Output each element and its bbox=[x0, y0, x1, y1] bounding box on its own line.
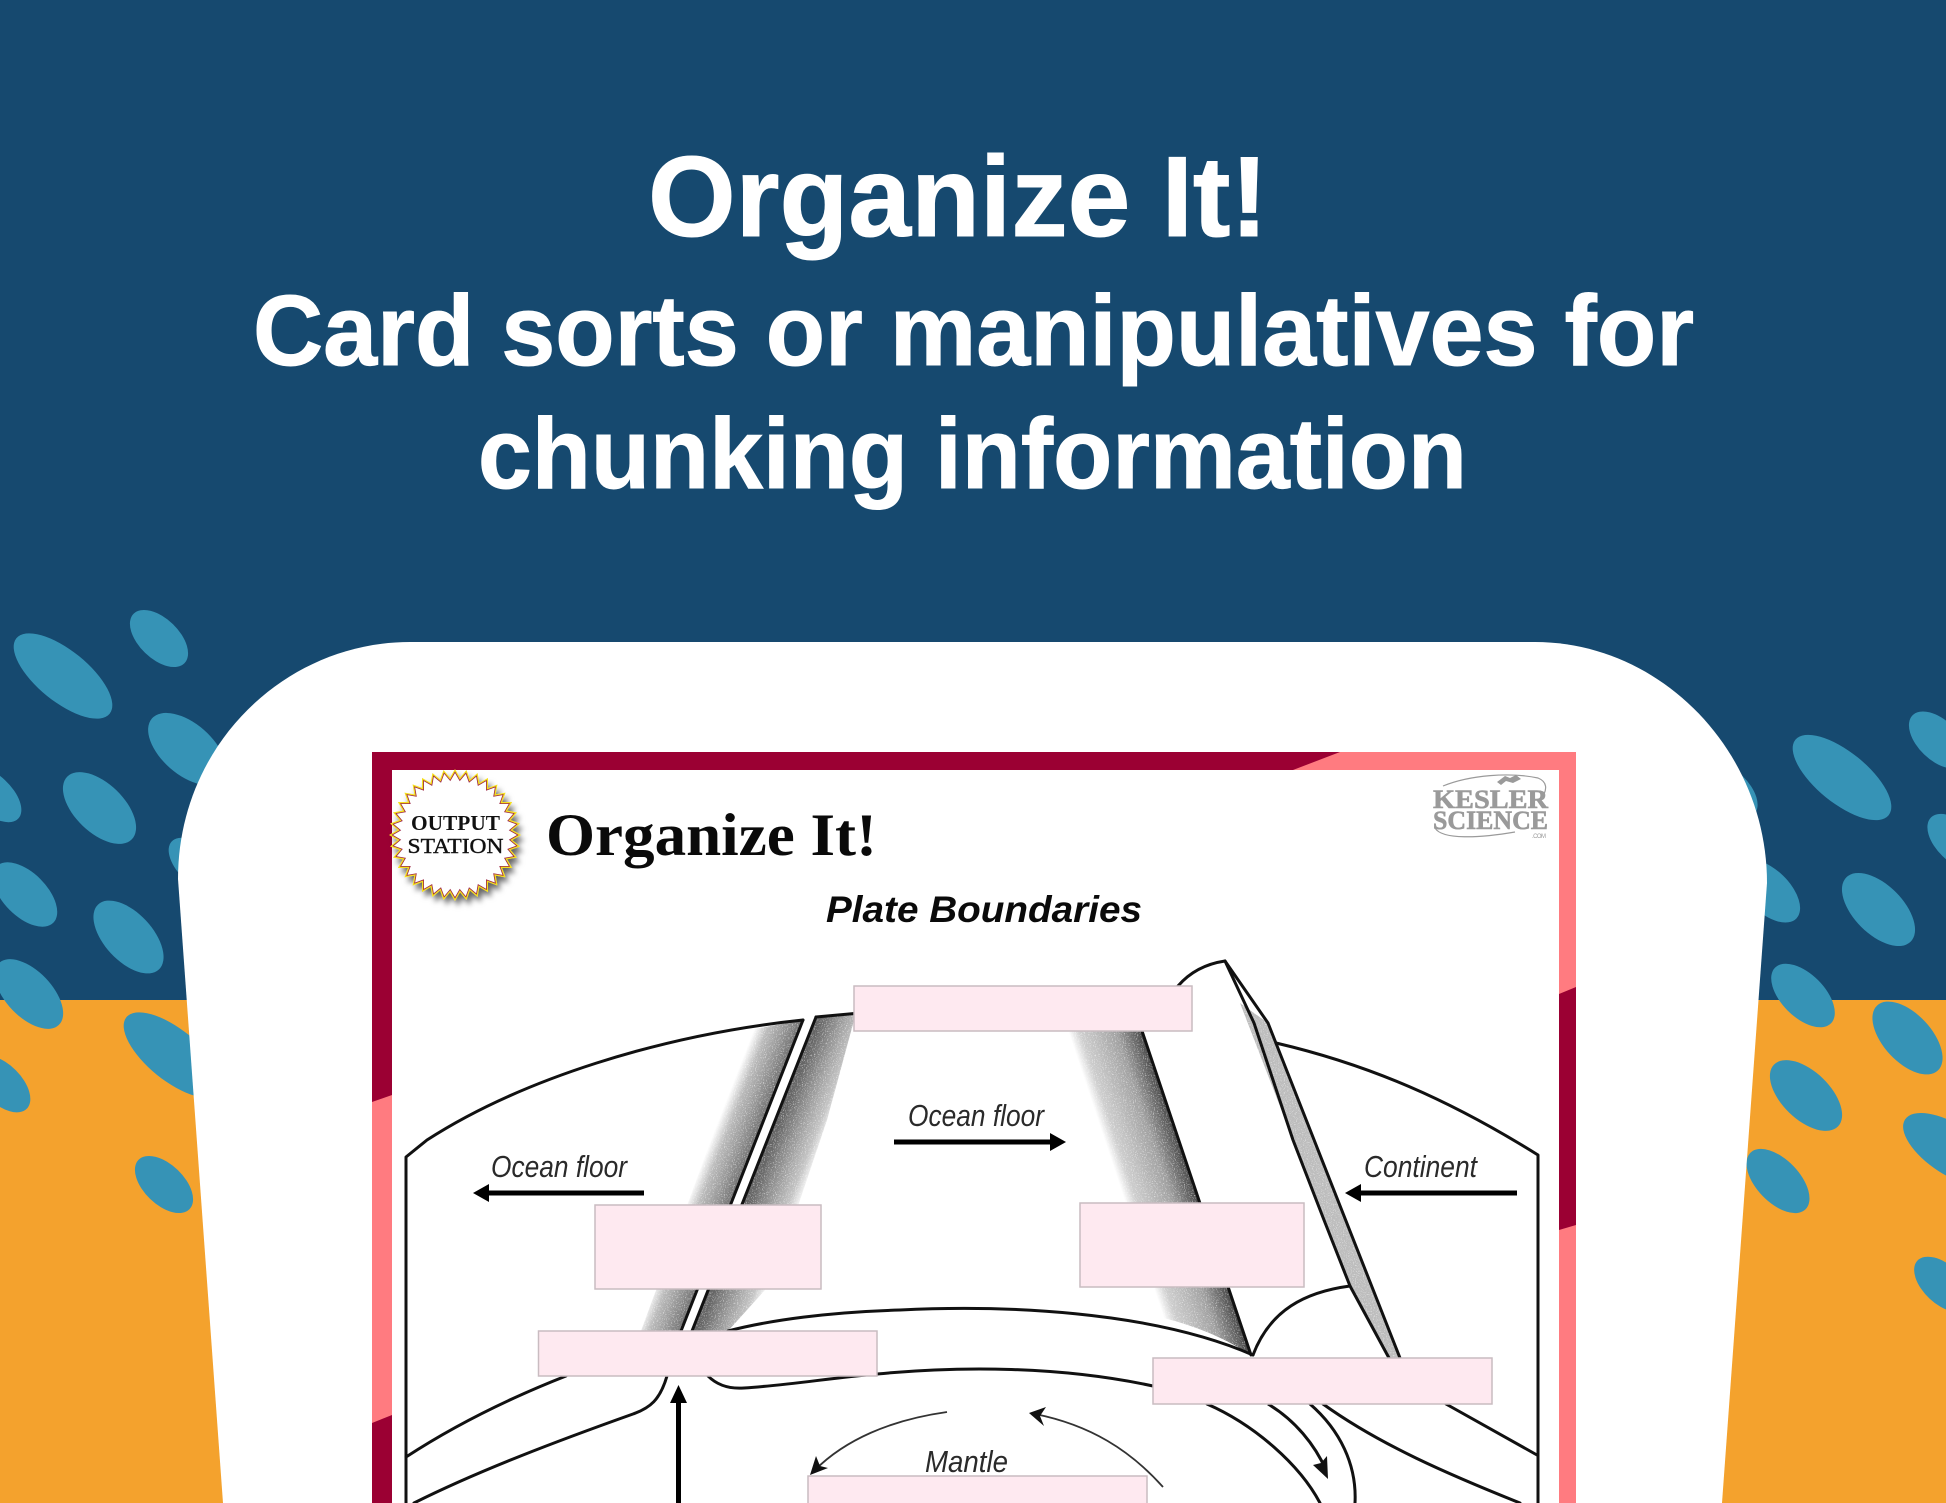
logo: Kesler Science: KESLER bbox=[1433, 785, 1548, 814]
background: navy upper band bbox=[0, 0, 1946, 1000]
shading: mountain wedge bbox=[1240, 1003, 1400, 1358]
shading: rift right bbox=[692, 1013, 856, 1331]
arrow: continent bbox=[1345, 1184, 1517, 1202]
icon: output station badge: STATION bbox=[408, 834, 503, 858]
icon: output station badge bbox=[393, 753, 537, 907]
arrow: mantle current right bbox=[1029, 1407, 1163, 1487]
label: ocean floor left: Ocean floor bbox=[491, 1149, 628, 1184]
worksheet frame bbox=[372, 752, 1576, 1503]
title: Card sorts or manipulatives for bbox=[253, 275, 1694, 387]
arrow: ocean floor right bbox=[894, 1133, 1066, 1151]
decoration: teal blobs left bbox=[0, 599, 239, 1224]
answer box: middle left bbox=[538, 1331, 877, 1376]
arrow: mantle current left bbox=[810, 1412, 947, 1475]
worksheet heading: Organize It! bbox=[546, 802, 877, 868]
answer box: left bbox=[595, 1205, 821, 1289]
panel: white rounded card bbox=[178, 642, 1767, 1503]
diagram: plate boundaries bbox=[406, 961, 1538, 1503]
worksheet subheading: Plate Boundaries bbox=[826, 889, 1142, 930]
label: mantle: Mantle bbox=[925, 1444, 1008, 1479]
label: continent: Continent bbox=[1364, 1149, 1478, 1184]
logo: Kesler Science bbox=[1433, 775, 1548, 840]
arrow: subducting plate bbox=[1268, 1404, 1328, 1479]
shading: rift left bbox=[641, 1020, 803, 1331]
answer box: middle right bbox=[1153, 1358, 1492, 1404]
title: chunking information bbox=[478, 398, 1467, 510]
title: Organize It! bbox=[648, 134, 1268, 261]
title bbox=[253, 134, 1694, 510]
label: ocean floor center: Ocean floor bbox=[908, 1098, 1045, 1133]
logo: Kesler Science: .COM bbox=[1532, 834, 1546, 840]
answer box: top bbox=[854, 986, 1192, 1031]
arrow: ocean floor left bbox=[473, 1184, 644, 1202]
plate outlines bbox=[406, 961, 1538, 1503]
shading: trench bbox=[1068, 1031, 1251, 1355]
arrow: magma rising bbox=[670, 1385, 687, 1503]
icon: output station badge: OUTPUT bbox=[411, 811, 500, 835]
answer box: right bbox=[1080, 1203, 1304, 1287]
answer box: mantle bbox=[808, 1476, 1147, 1503]
logo: Kesler Science: SCIENCE bbox=[1433, 806, 1548, 835]
background: orange lower band bbox=[0, 1000, 1946, 1503]
decoration: teal blobs right bbox=[1690, 701, 1946, 1323]
